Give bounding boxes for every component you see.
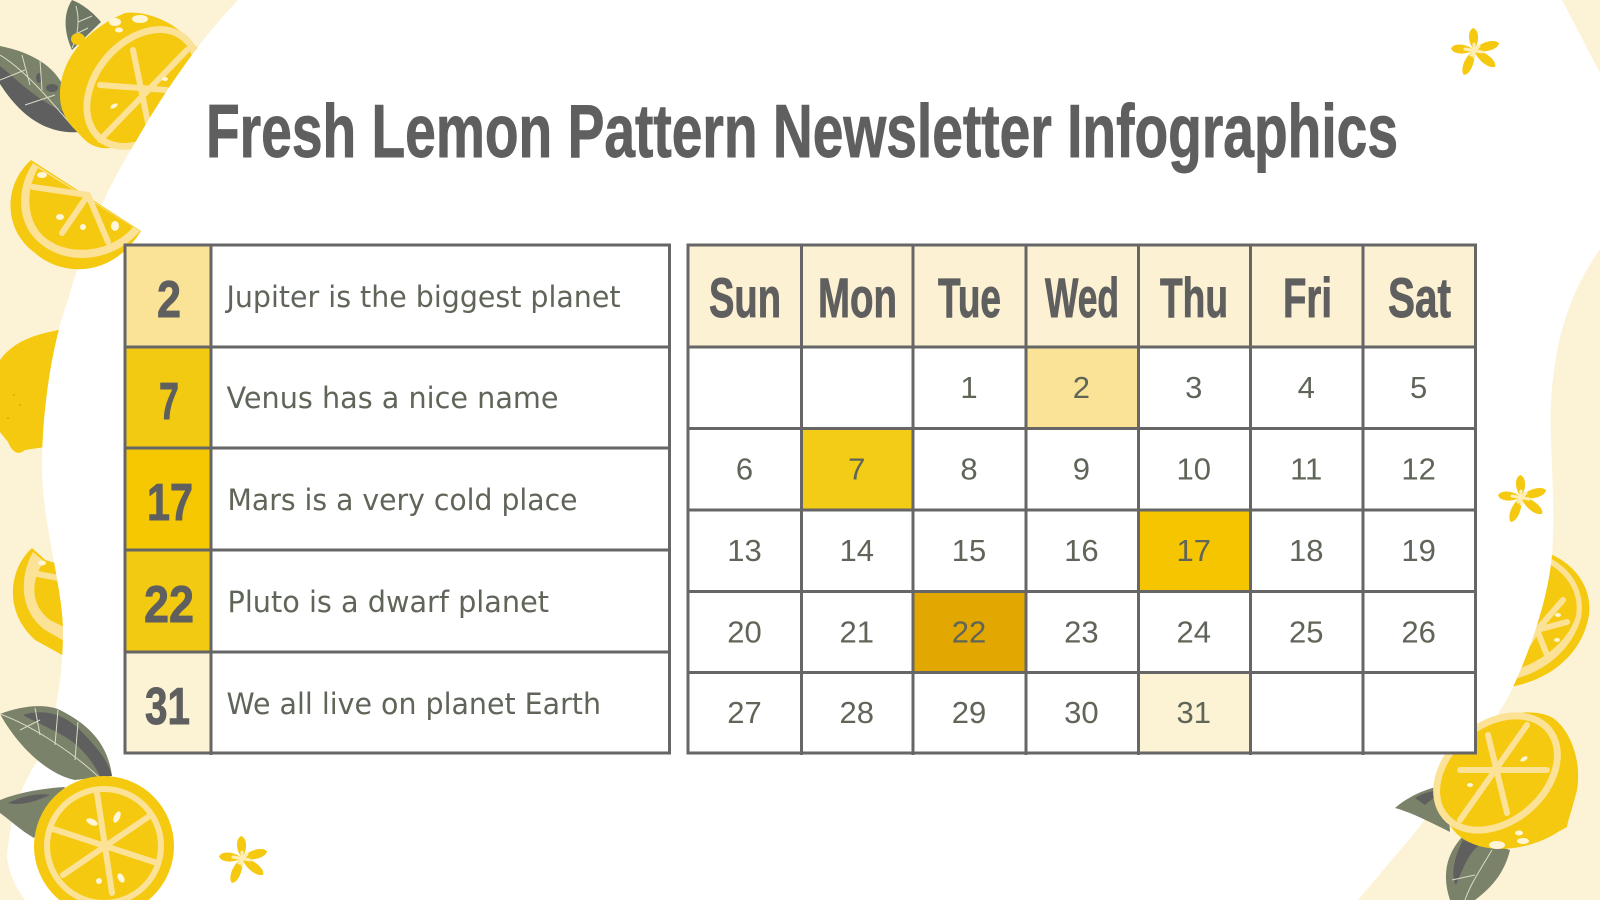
calendar week 3: 15 bbox=[952, 533, 986, 568]
calendar week 3: 18 bbox=[1289, 533, 1323, 568]
calendar week 1 bbox=[960, 370, 1427, 405]
lemon: left edge whole bbox=[0, 330, 62, 453]
calendar week 2: 9 bbox=[1073, 452, 1090, 486]
flower: top right bbox=[1451, 28, 1500, 77]
calendar weekday headers: Sat bbox=[1388, 266, 1451, 329]
calendar week 1: 5 bbox=[1410, 370, 1427, 405]
calendar week 2: 6 bbox=[736, 452, 753, 486]
calendar weekday headers: Wed bbox=[1045, 266, 1119, 329]
list date numbers: 7 bbox=[159, 373, 179, 431]
leaves behind top-left lemon bbox=[0, 0, 101, 132]
lemon: left wedge bbox=[13, 548, 90, 656]
list descriptions: Venus has a nice name bbox=[226, 381, 558, 415]
calendar week 5: 30 bbox=[1064, 695, 1099, 730]
calendar week 5: 27 bbox=[727, 695, 762, 730]
calendar weekday headers: Mon bbox=[818, 266, 897, 329]
calendar week 4: 20 bbox=[727, 614, 762, 650]
calendar week 4: 24 bbox=[1177, 614, 1211, 650]
calendar week 1: 3 bbox=[1185, 370, 1202, 405]
lemon: bottom-right half with leaves bbox=[1395, 688, 1585, 900]
calendar week 4: 23 bbox=[1064, 614, 1099, 650]
calendar week 3: 19 bbox=[1401, 533, 1436, 568]
calendar week 5: 31 bbox=[1177, 695, 1211, 730]
list descriptions: Mars is a very cold place bbox=[228, 483, 578, 517]
panel: events list bbox=[124, 245, 671, 755]
calendar weekday headers: Fri bbox=[1283, 266, 1332, 329]
calendar week 2: 12 bbox=[1401, 452, 1436, 486]
calendar weekday headers: Tue bbox=[938, 266, 1001, 329]
calendar week 2: 8 bbox=[960, 452, 978, 486]
calendar week 5 bbox=[727, 695, 1211, 730]
calendar weekday headers bbox=[709, 266, 1451, 329]
calendar week 4: 26 bbox=[1401, 614, 1436, 650]
list date numbers: 22 bbox=[144, 576, 194, 634]
list grid lines bbox=[124, 245, 671, 755]
calendar grid lines bbox=[686, 244, 1477, 755]
calendar week 2: 10 bbox=[1177, 452, 1211, 486]
calendar week 4: 25 bbox=[1289, 614, 1323, 650]
lemon: right wedge bbox=[1480, 552, 1589, 687]
calendar week 5: 28 bbox=[840, 695, 874, 730]
calendar week 1: 4 bbox=[1298, 370, 1315, 405]
calendar header background bbox=[688, 245, 1475, 347]
list date numbers: 31 bbox=[145, 678, 190, 736]
lemon: top-left wedge bbox=[10, 160, 141, 269]
lemon: top-left half bbox=[59, 3, 225, 173]
flower: right middle bbox=[1498, 475, 1547, 524]
panel: calendar bbox=[686, 244, 1477, 755]
calendar week 3: 14 bbox=[840, 533, 874, 568]
calendar week 3: 16 bbox=[1064, 533, 1099, 568]
list descriptions: We all live on planet Earth bbox=[226, 687, 601, 721]
list date numbers bbox=[144, 271, 194, 736]
calendar week 2: 11 bbox=[1290, 452, 1322, 486]
list descriptions: Jupiter is the biggest planet bbox=[225, 280, 620, 314]
calendar week 2: 7 bbox=[848, 452, 865, 486]
flower: bottom left bbox=[219, 836, 268, 885]
calendar week 4: 22 bbox=[952, 614, 986, 650]
list date numbers: 17 bbox=[147, 474, 193, 532]
calendar highlighted days bbox=[800, 347, 1250, 753]
calendar weekday headers: Thu bbox=[1160, 266, 1228, 329]
calendar weekday headers: Sun bbox=[709, 266, 781, 329]
calendar week 3 bbox=[727, 533, 1436, 568]
calendar week 1: 2 bbox=[1073, 370, 1090, 405]
calendar week 4 bbox=[727, 614, 1436, 650]
calendar week 5: 29 bbox=[952, 695, 986, 730]
lemon: bottom-left slice with leaves bbox=[0, 706, 174, 900]
list date cell fills bbox=[125, 245, 211, 753]
calendar week 3: 17 bbox=[1177, 533, 1211, 568]
list descriptions bbox=[225, 280, 620, 721]
calendar week 3: 13 bbox=[727, 533, 762, 568]
calendar week 4: 21 bbox=[840, 614, 874, 650]
list descriptions: Pluto is a dwarf planet bbox=[228, 585, 549, 619]
calendar week 1: 1 bbox=[960, 370, 978, 405]
list date numbers: 2 bbox=[157, 271, 181, 329]
calendar week 2 bbox=[736, 452, 1436, 486]
